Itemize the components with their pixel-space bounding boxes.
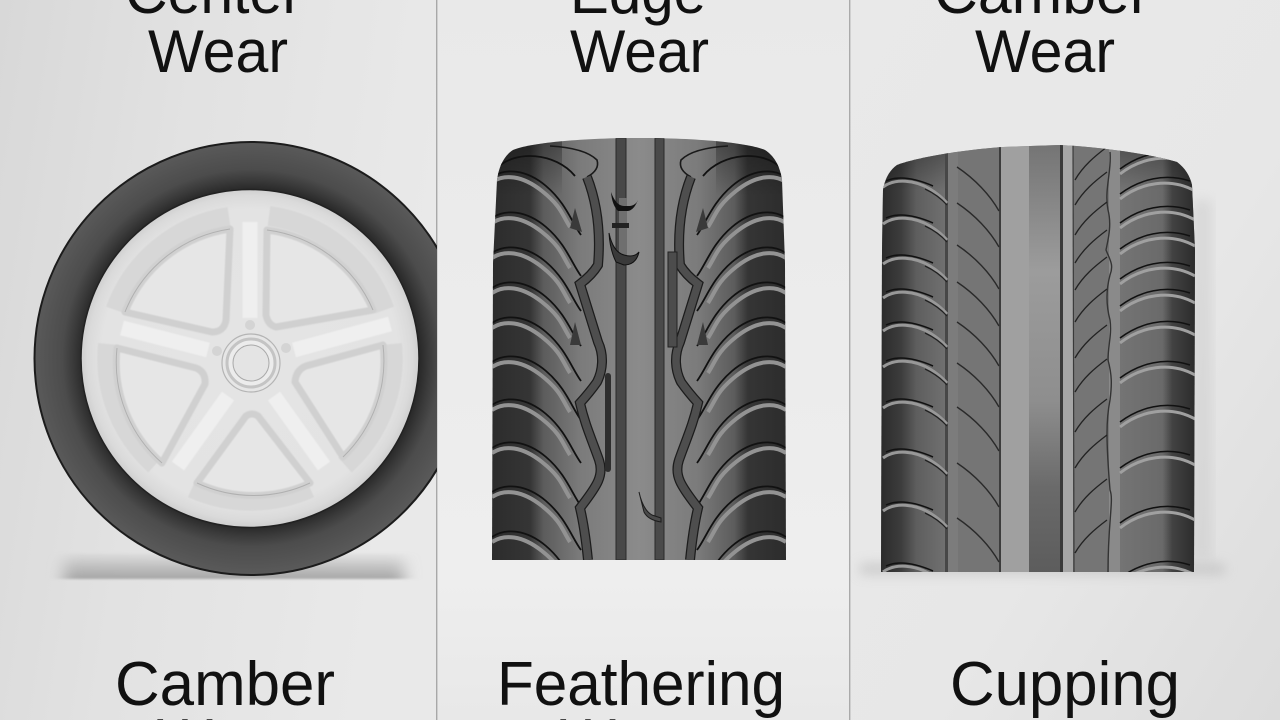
icon: cupped tire tread <box>880 140 1200 590</box>
heading: center wear <box>125 0 302 85</box>
heading: feathering wear: Feathering <box>497 650 785 719</box>
shadow beside and beneath third tire <box>860 200 1225 574</box>
heading: center wear: Wear <box>148 18 288 85</box>
diagonal sipes <box>957 147 1107 562</box>
center bands <box>945 140 1120 575</box>
heading: camber wear (lower): Camber <box>115 650 335 719</box>
icon: feathered tire tread <box>490 136 788 595</box>
right shoulder ribs <box>680 146 786 595</box>
panel: center wear / camber wear background <box>0 0 437 720</box>
heading: edge wear: Wear <box>570 18 709 85</box>
tire <box>34 142 468 575</box>
rim <box>81 190 419 528</box>
winding grooves <box>580 177 698 560</box>
right shoulder ribs <box>1120 152 1195 583</box>
heading: cupping: Cupping <box>950 650 1180 719</box>
wheel hub <box>212 320 291 392</box>
heading: camber wear <box>934 0 1150 85</box>
panel: edge wear / feathering background <box>437 0 849 720</box>
panel: camber wear / cupping background <box>849 0 1280 720</box>
heading: camber wear: Wear <box>975 18 1115 85</box>
left shoulder ribs <box>492 146 598 595</box>
center grooves <box>570 138 708 560</box>
left shoulder ribs <box>883 178 947 590</box>
icon: wheel with five-spoke rim <box>34 142 468 575</box>
ground shadow under wheel <box>64 553 404 579</box>
